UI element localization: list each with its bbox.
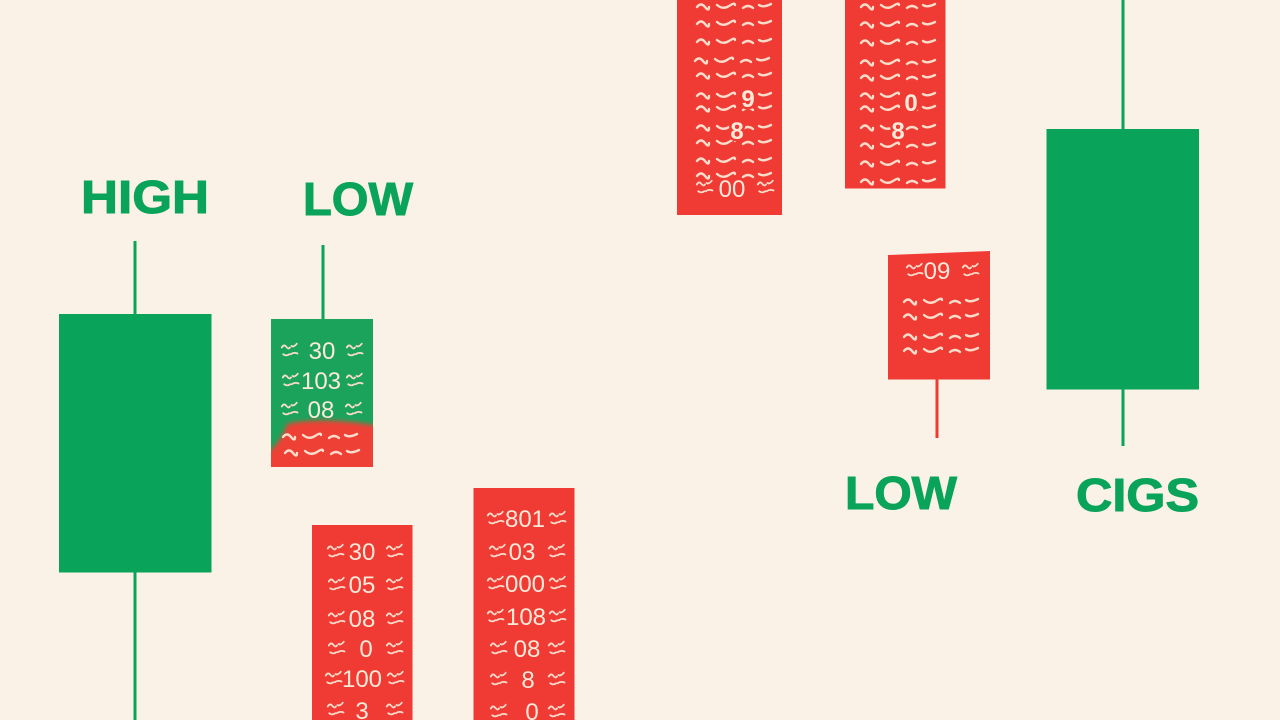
candle: red top right (845, 0, 946, 188)
candle: large green right (1046, 0, 1199, 446)
candle: red top left: 8 (730, 118, 744, 145)
candle: red lower middle (474, 488, 574, 720)
candle: red lower left: 0 (359, 636, 373, 663)
candle: red top left: 00 (719, 176, 745, 203)
candle: red top left: 9 (741, 86, 755, 113)
candle: red top right: 8 (891, 118, 905, 145)
candle: green and red mixed (271, 245, 373, 467)
candle: red small right (888, 251, 990, 438)
candle: red lower left: 100 (342, 666, 382, 693)
candle: large green left (59, 241, 212, 720)
candle: green and red mixed: 08 (308, 397, 334, 424)
candle: red lower middle: 801 (505, 506, 545, 533)
candle: red lower left: 08 (349, 606, 375, 633)
candle: green and red mixed: 30 (309, 338, 335, 365)
candle: red lower left: 05 (349, 572, 375, 599)
candle: red top left (677, 0, 782, 215)
candle: red lower middle: 03 (509, 539, 535, 566)
candle: red lower middle: 108 (506, 604, 546, 631)
label: HIGH: HIGH (81, 171, 209, 223)
label: LOW right: LOW (845, 467, 958, 519)
label: LOW left: LOW (303, 173, 414, 225)
candle: red small right: 09 (924, 258, 950, 285)
candle: red lower left (312, 525, 412, 720)
candle: red lower left: 30 (349, 539, 375, 566)
candle: red lower middle: 08 (514, 636, 540, 663)
candle: green and red mixed: 103 (301, 368, 341, 395)
candle: red top right: 0 (904, 90, 918, 117)
candle: red lower middle: 8 (521, 667, 535, 694)
candle: red lower middle: 000 (505, 571, 545, 598)
label: CIGS: CIGS (1076, 469, 1199, 521)
